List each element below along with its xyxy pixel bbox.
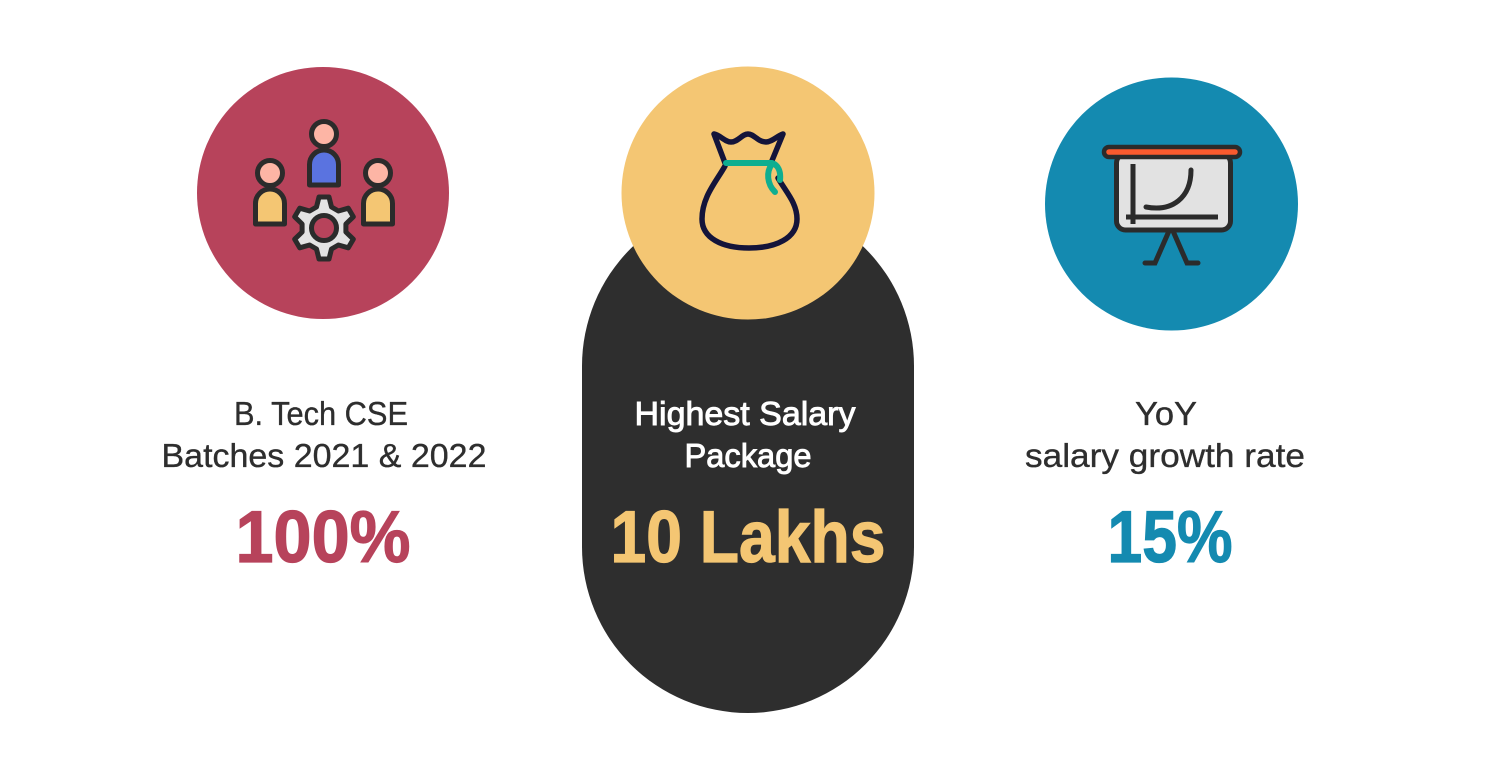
center label line 2: Package	[684, 437, 812, 474]
right label line 2: salary growth rate	[1025, 437, 1305, 474]
red circle	[197, 67, 449, 319]
center label: Highest Salary	[634, 395, 856, 432]
center value: 10 Lakhs	[610, 497, 886, 578]
left label line 2: Batches 2021 & 2022	[162, 437, 486, 474]
blue circle	[1045, 78, 1298, 330]
right value: 15%	[1108, 497, 1232, 578]
right label: YoY	[1135, 395, 1197, 432]
icon: money bag	[702, 134, 797, 248]
left value: 100%	[236, 497, 410, 578]
yellow circle	[622, 66, 874, 320]
dark pill panel	[582, 200, 914, 713]
left label: B. Tech CSE	[234, 395, 408, 432]
icon: team with gear	[256, 122, 392, 259]
icon: presentation board	[1104, 147, 1240, 263]
